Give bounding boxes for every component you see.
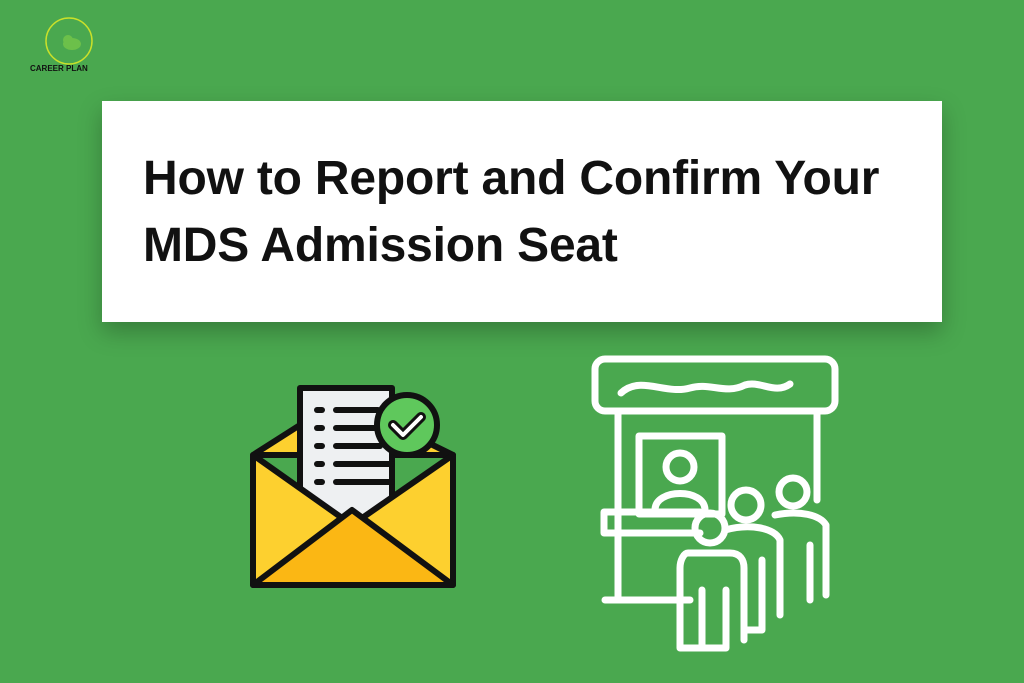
icon: envelope with checked letter: [250, 385, 456, 588]
title card: [102, 101, 942, 322]
title: How to Report and Confirm Your: [143, 152, 879, 205]
title: MDS Admission Seat: [143, 219, 618, 272]
title: [143, 152, 879, 272]
logo: CAREER PLAN: [30, 64, 88, 73]
icon: booth with queue: [592, 356, 838, 652]
logo: [30, 17, 93, 73]
